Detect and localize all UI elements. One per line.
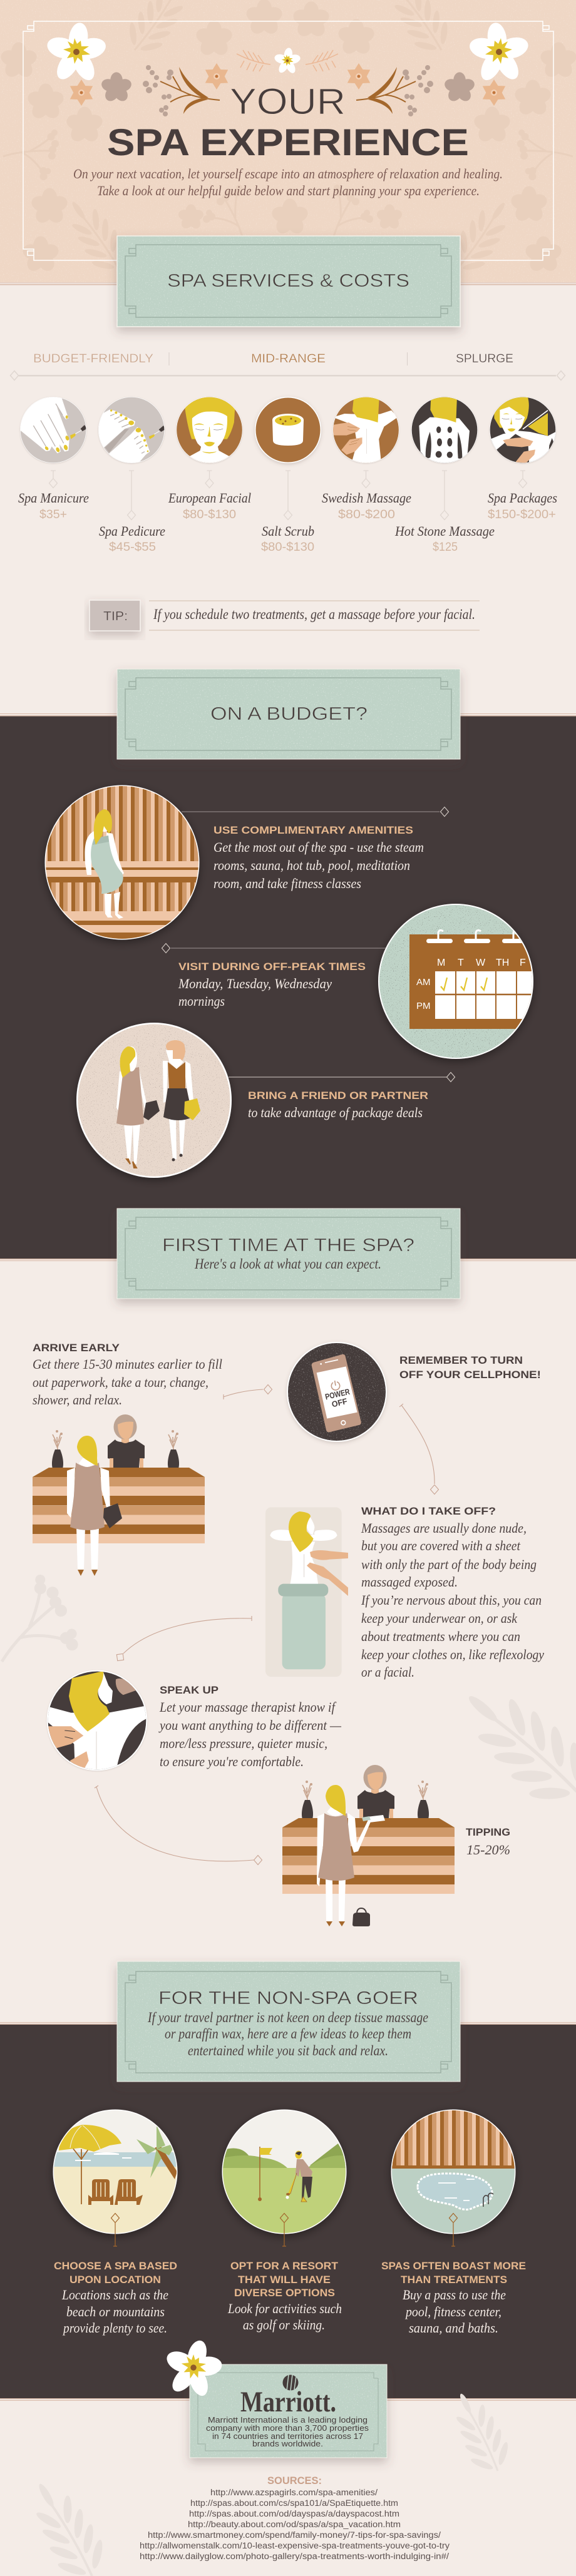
price range timeline: MID-RANGE [251,352,326,365]
calendar illustration circle: T [458,958,464,968]
what do I take off text: with only the part of the body being [361,1556,537,1572]
marriott card: in 74 countries and territories across 17 [212,2431,363,2441]
service labels: $35+ [39,508,67,521]
decorative twig: left [2,1572,96,1684]
choose a spa text: UPON LOCATION [69,2274,161,2286]
tipping text: TIPPING [466,1826,510,1838]
speak up text: SPEAK UP [160,1684,219,1696]
what do I take off text: If you’re nervous about this, you can [361,1592,542,1608]
banner: first time at the spa: Here's a look at what you can expect. [194,1256,381,1272]
marriott card [190,2364,387,2458]
intro text: Take a look at our helpful guide below and start planning your spa experience. [97,183,480,198]
banner: first time at the spa: FIRST TIME AT THE SPA? [162,1235,414,1255]
spas often boast text: sauna, and baths. [409,2320,498,2336]
choose a spa text [54,2260,177,2336]
opt for a resort text: THAT WILL HAVE [238,2274,331,2286]
what do I take off text: keep your clothes on, like reflexology [361,1647,544,1662]
banner: for the non-spa goer [117,1961,460,2082]
use complimentary amenities text: USE COMPLIMENTARY AMENITIES [213,824,413,836]
banner: first time at the spa [117,1209,460,1299]
marriott card: company with more than 3,700 properties [206,2423,369,2433]
spas often boast text [381,2260,526,2336]
header white frame [23,21,553,260]
bring a friend text: to take advantage of package deals [248,1105,423,1120]
decorative fern: lower left [16,2470,116,2576]
marriott card: Marriott International is a leading lodging [208,2415,368,2425]
icon: spa packages [489,397,557,464]
decorative fern: upper right [445,1668,576,1822]
arrive early text [33,1342,222,1408]
sources: SOURCES: [267,2475,322,2487]
sources: http://spas.about.com/cs/spa101/a/SpaEtiquette.htm [190,2498,398,2508]
intro text: On your next vacation, let yourself escape into an atmosphere of relaxation and healing. [73,166,503,181]
visit during off-peak times text: mornings [178,993,225,1009]
speak up text: you want anything to be different — [158,1717,341,1733]
service labels: $80-$130 [261,541,314,554]
opt for a resort text: OPT FOR A RESORT [230,2260,339,2272]
flower on marriott card [160,2335,227,2401]
sources: http://allwomenstalk.com/10-least-expensive-spa-treatments-youve-got-to-try [140,2541,450,2550]
speak up text: to ensure you're comfortable. [160,1754,304,1769]
sources: http://spas.about.com/od/dayspas/a/dayspacost.htm [189,2509,399,2518]
choose a spa text: CHOOSE A SPA BASED [54,2260,177,2272]
banner: spa services and costs: SPA SERVICES & COSTS [167,271,409,291]
golf illustration circle [222,2109,351,2237]
what do I take off text [361,1505,544,1680]
speak up text: more/less pressure, quieter music, [160,1735,327,1751]
arrow: arrive early to phone [224,1384,272,1399]
use complimentary amenities text [182,807,448,891]
calendar illustration circle: TH [496,958,509,968]
arrive early text: out paperwork, take a tour, change, [33,1374,208,1390]
icon: phone circle [287,1342,387,1442]
tipping text: 15-20% [466,1842,510,1858]
visit during off-peak times text: VISIT DURING OFF-PEAK TIMES [178,961,366,973]
use complimentary amenities text: Get the most out of the spa - use the steam [213,839,424,855]
calendar illustration circle: AM [416,977,431,988]
icon: spa manicure [19,397,87,464]
icon: phone circle: POWER [324,1387,351,1401]
pool illustration circle [391,2109,517,2237]
price range timeline [10,352,565,381]
reception desk scene: arriving [33,1414,205,1576]
opt for a resort text: Look for activities such [227,2301,342,2316]
friends illustration circle [76,1023,232,1178]
beach illustration circle [53,2109,178,2236]
title: SPA EXPERIENCE [107,121,469,163]
service labels: Spa Pedicure [99,523,165,539]
bring a friend text [229,1073,455,1120]
arrow: speak up to tipping [95,1786,262,1865]
speak up illustration circle [44,1669,148,1776]
calendar illustration circle: M [437,958,445,968]
service labels: Hot Stone Massage [394,523,495,539]
calendar illustration circle: PM [416,1001,431,1011]
choose a spa text: provide plenty to see. [62,2320,167,2336]
what do I take off text: Massages are usually done nude, [361,1520,527,1536]
what do I take off text: massaged exposed. [361,1574,458,1590]
banner: on a budget: ON A BUDGET? [210,704,368,724]
price range timeline: BUDGET-FRIENDLY [33,352,153,365]
header left twig [143,65,220,116]
remember to turn off your cellphone heading: OFF YOUR CELLPHONE! [399,1369,541,1381]
icon: hot stone massage [411,397,478,464]
banner: for the non-spa goer: or paraffin wax, here are a few ideas to keep them [165,2026,411,2042]
marriott card: Marriott. [240,2386,336,2418]
what do I take off text: keep your underwear on, or ask [361,1610,518,1626]
tip callout: If you schedule two treatments, get a massage before your facial. [153,606,475,622]
remember to turn off your cellphone heading [399,1354,541,1381]
banner: on a budget [117,669,460,759]
title: YOUR [230,81,346,122]
service labels: Spa Manicure [18,490,89,506]
service labels: $150-$200+ [488,508,556,521]
opt for a resort text: DIVERSE OPTIONS [234,2287,335,2299]
sauna illustration circle [44,782,200,945]
tip callout [90,600,480,631]
arrive early text: shower, and relax. [33,1392,122,1408]
service labels: Swedish Massage [322,490,411,506]
tipping text [466,1826,510,1858]
choose a spa text: beach or mountains [66,2304,165,2319]
price range timeline: SPLURGE [456,352,513,365]
choose a spa text: Locations such as the [61,2287,168,2303]
arrive early text: ARRIVE EARLY [33,1342,120,1354]
service labels: European Facial [168,490,251,506]
use complimentary amenities text: rooms, sauna, hot tub, pool, meditation [213,857,410,873]
calendar illustration circle [378,904,542,1060]
banner: spa services and costs [117,236,460,327]
arrive early text: Get there 15-30 minutes earlier to fill [33,1356,222,1372]
calendar illustration circle: W [476,958,486,968]
spas often boast text: Buy a pass to use the [403,2287,506,2303]
spas often boast text: SPAS OFTEN BOAST MORE [381,2260,526,2272]
sources: http://www.azspagirls.com/spa-amenities/ [210,2488,378,2497]
sources: http://www.dailyglow.com/photo-gallery/spa-treatments-worth-indulging-in#/ [140,2552,449,2561]
service labels: $125 [433,541,458,554]
service labels: $80-$130 [183,508,236,521]
opt for a resort text: as golf or skiing. [243,2317,325,2333]
intro text [73,166,503,198]
massage table illustration [265,1507,348,1677]
marriott card: brands worldwide. [252,2439,323,2448]
non-spa stems [111,2213,457,2246]
service labels: Spa Packages [488,490,557,506]
icon: salt scrub [255,397,321,463]
spas often boast text: THAN TREATMENTS [401,2274,507,2286]
icon: phone circle: OFF [331,1396,348,1409]
icon: european facial [175,397,243,464]
banner: for the non-spa goer: FOR THE NON-SPA GOER [158,1988,418,2008]
header right twig [356,65,433,116]
header panel [0,0,576,285]
banner: for the non-spa goer: entertained while you sit back and relax. [188,2043,388,2058]
title [107,81,469,163]
icon: swedish massage [332,397,399,464]
service labels: $45-$55 [109,541,156,554]
what do I take off text: about treatments where you can [361,1628,520,1644]
icon: spa pedicure [98,397,165,464]
calendar illustration circle: F [520,958,526,968]
what do I take off text: but you are covered with a sheet [361,1538,521,1553]
use complimentary amenities text: room, and take fitness classes [213,876,361,891]
bring a friend text: BRING A FRIEND OR PARTNER [248,1090,428,1101]
arrow: massage to speak up [116,1616,252,1661]
header floral decoration [44,21,531,106]
speak up text: Let your massage therapist know if [159,1699,337,1715]
sources: http://beauty.about.com/od/spas/a/spa_vacation.htm [188,2520,401,2529]
opt for a resort text [227,2260,342,2333]
arrow: phone to massage [399,1404,438,1495]
what do I take off text: or a facial. [361,1664,414,1680]
spas often boast text: pool, fitness center, [404,2304,501,2319]
visit during off-peak times text: Monday, Tuesday, Wednesday [178,976,332,991]
sources: http://www.smartmoney.com/spend/family-money/7-tips-for-spa-savings/ [148,2530,441,2540]
reception desk scene: tipping [282,1765,455,1926]
service labels: $80-$200 [338,508,395,521]
visit during off-peak times text [162,944,386,1009]
what do I take off text: WHAT DO I TAKE OFF? [361,1505,496,1517]
remember to turn off your cellphone heading: REMEMBER TO TURN [399,1354,523,1366]
speak up text [158,1684,341,1769]
service labels: Salt Scrub [262,523,314,539]
banner: for the non-spa goer: If your travel partner is not keen on deep tissue massage [147,2010,428,2025]
tip callout: TIP: [103,610,128,623]
sources [140,2475,450,2561]
decorative fern: lower right [441,2384,518,2480]
service labels [18,471,557,554]
